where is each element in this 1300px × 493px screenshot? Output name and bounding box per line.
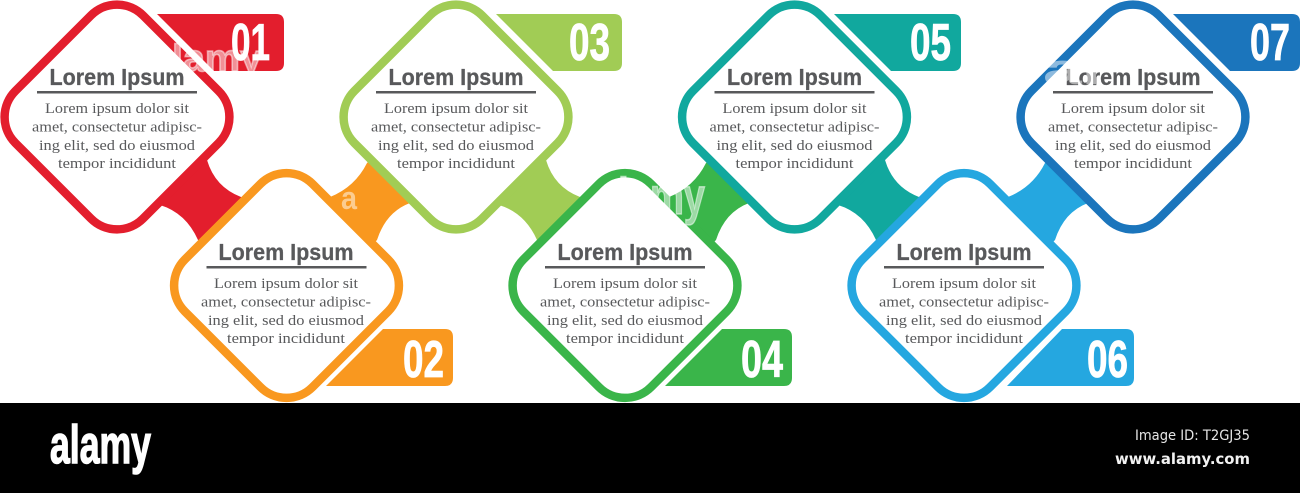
- panel: step 2 diamond: ing elit, sed do eiusmod: [208, 313, 365, 329]
- panel: step 3 diamond: amet, consectetur adipisc-: [371, 120, 541, 136]
- number tab 05: [834, 14, 961, 72]
- panel: step 2 diamond: tempor incididunt: [227, 331, 346, 347]
- footer logo: alamy: alamy: [50, 415, 151, 475]
- number tab 05: 05: [910, 14, 951, 72]
- panel: step 6 diamond: Lorem ipsum dolor sit: [892, 276, 1037, 292]
- panel: step 5 diamond: tempor incididunt: [736, 156, 854, 172]
- number tab 06: [1007, 329, 1134, 389]
- panel: step 3 diamond: ing elit, sed do eiusmod: [378, 138, 535, 154]
- connector: step 4 to 5: [662, 156, 756, 247]
- panel: step 5 diamond: Lorem Ipsum: [727, 64, 862, 90]
- panel: step 7 diamond: ing elit, sed do eiusmod: [1055, 138, 1212, 154]
- panel: step 2 diamond: Lorem Ipsum: [218, 239, 354, 265]
- footer bar: [0, 403, 1300, 493]
- number tab 02: 02: [403, 331, 444, 389]
- number tab 03: 03: [569, 14, 610, 72]
- connector: step 3 to 4: [492, 153, 587, 247]
- panel: step 5 diamond: [667, 0, 922, 245]
- panel: step 3 diamond: Lorem Ipsum: [388, 64, 524, 90]
- footer url: www.alamy.com: [1115, 450, 1250, 468]
- panel: step 2 diamond: amet, consectetur adipisc-: [201, 294, 371, 310]
- panel: step 2 diamond: Lorem ipsum dolor sit: [214, 276, 359, 292]
- connector: step 5 to 6: [831, 153, 926, 247]
- panel: step 3 diamond: Lorem ipsum dolor sit: [384, 101, 529, 117]
- panel: step 1 diamond: ing elit, sed do eiusmod: [39, 138, 196, 154]
- panel: step 1 diamond: Lorem Ipsum: [50, 64, 184, 90]
- panel: step 4 diamond: Lorem Ipsum: [558, 239, 692, 265]
- panel: step 4 diamond: [497, 158, 753, 413]
- panel: step 4 diamond: amet, consectetur adipisc-: [540, 294, 710, 310]
- number tab 06: 06: [1087, 331, 1128, 389]
- panel: step 7 diamond: Lorem Ipsum: [1066, 64, 1200, 90]
- watermark overlays: lamy: [172, 38, 262, 80]
- watermark overlays: a: [341, 180, 357, 216]
- number tab 03: [496, 14, 622, 72]
- panel: step 1 diamond: Lorem ipsum dolor sit: [45, 101, 190, 117]
- number tab 02: [326, 329, 453, 389]
- panel: step 4 diamond: Lorem ipsum dolor sit: [553, 276, 698, 292]
- panel: step 4 diamond: ing elit, sed do eiusmod: [547, 313, 704, 329]
- panel: step 7 diamond: Lorem ipsum dolor sit: [1061, 101, 1206, 117]
- number tab 01: 01: [231, 14, 270, 72]
- panel: step 7 diamond: tempor incididunt: [1074, 156, 1193, 172]
- panel: step 5 diamond: ing elit, sed do eiusmod: [716, 138, 873, 154]
- panel: step 1 diamond: amet, consectetur adipisc-: [32, 120, 202, 136]
- connector: step 1 to 2: [153, 153, 248, 247]
- panel: step 3 diamond: tempor incididunt: [397, 156, 516, 172]
- panel: step 5 diamond: Lorem ipsum dolor sit: [722, 101, 867, 117]
- number tab 04: [665, 329, 792, 389]
- panel: step 2 diamond: [159, 158, 414, 413]
- panel: step 6 diamond: amet, consectetur adipisc-: [879, 294, 1049, 310]
- panel: step 1 diamond: tempor incididunt: [58, 156, 177, 172]
- panel: step 1 diamond: [0, 0, 245, 245]
- panel: step 6 diamond: ing elit, sed do eiusmod: [886, 313, 1043, 329]
- panel: step 6 diamond: tempor incididunt: [905, 331, 1024, 347]
- panel: step 3 diamond: [328, 0, 584, 245]
- panel: step 6 diamond: Lorem Ipsum: [896, 239, 1032, 265]
- panel: step 5 diamond: amet, consectetur adipisc-: [710, 120, 880, 136]
- panel: step 7 diamond: amet, consectetur adipisc-: [1048, 120, 1218, 136]
- number tab 04: 04: [741, 331, 783, 389]
- footer image id: Image ID: T2GJ35: [1135, 428, 1250, 444]
- watermark overlays: al: [1043, 45, 1101, 94]
- connector: step 2 to 3: [323, 156, 417, 247]
- number tab 07: [1173, 14, 1300, 72]
- watermark overlays: [172, 38, 1101, 226]
- watermark overlays: alamy: [597, 168, 705, 226]
- connector: step 6 to 7: [1001, 156, 1095, 247]
- panel: step 6 diamond: [836, 158, 1092, 413]
- number tab 01: [157, 14, 284, 72]
- panel: step 4 diamond: tempor incididunt: [566, 331, 685, 347]
- panel: step 7 diamond: [1005, 0, 1261, 245]
